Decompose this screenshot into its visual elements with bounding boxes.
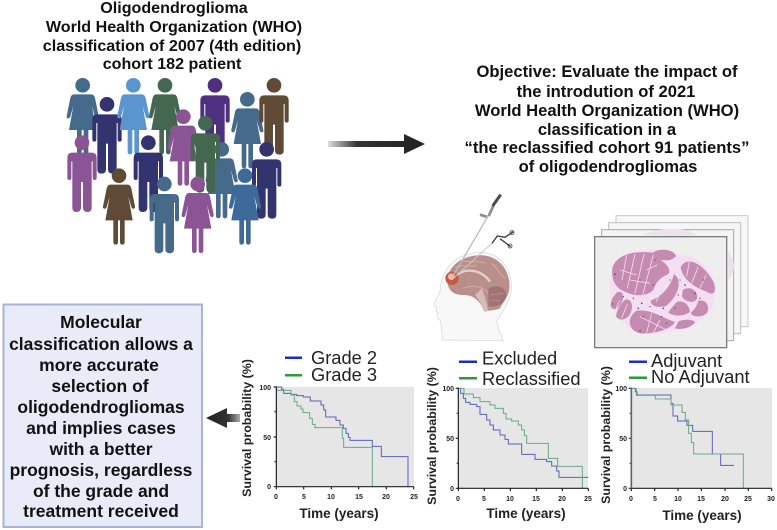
objective text	[465, 62, 749, 176]
forceps	[453, 243, 493, 278]
objective text: World Health Organization (WHO)	[475, 101, 739, 120]
objective text: the introdution of 2021	[517, 82, 695, 101]
legend: No Adjuvant	[651, 366, 750, 387]
arrow: to conclusion	[206, 408, 240, 428]
axis labels	[599, 366, 775, 523]
survival curves	[456, 388, 588, 491]
title	[43, 0, 302, 73]
conclusion box	[4, 304, 202, 527]
axis labels	[425, 367, 592, 521]
legend	[285, 347, 377, 385]
axis labels: 0	[456, 496, 460, 503]
conclusion box: oligodendrogliomas	[17, 397, 185, 417]
axis labels: 0	[274, 494, 278, 501]
arrow: to objective	[328, 134, 425, 154]
axis labels: Survival probability (%)	[425, 367, 439, 505]
title: cohort 182 patient	[103, 55, 242, 73]
axis labels: 100	[442, 386, 454, 393]
axis labels: 25	[410, 494, 418, 501]
axis labels: 20	[558, 496, 566, 503]
axis labels: Time (years)	[299, 506, 379, 521]
illustration: head with brain and surgical instruments	[434, 195, 514, 341]
legend: Adjuvant	[651, 350, 722, 371]
axis labels: Survival probability (%)	[240, 359, 254, 497]
axis labels: 100	[259, 385, 271, 392]
conclusion box: Molecular	[60, 312, 142, 332]
axis labels: 5	[482, 496, 486, 503]
survival curves	[629, 388, 772, 491]
title: World Health Organization (WHO)	[46, 18, 302, 36]
icon: crowd of patients	[67, 78, 289, 253]
legend	[629, 350, 750, 387]
conclusion box: with a better	[48, 439, 153, 459]
axis labels: 100	[615, 386, 627, 393]
axis labels	[240, 359, 418, 521]
legend: Excluded	[482, 348, 557, 368]
axis labels: 0	[629, 496, 633, 503]
conclusion box: of the grade and	[33, 481, 169, 501]
conclusion box: treatment received	[23, 501, 179, 521]
axis labels: 25	[584, 496, 592, 503]
axis labels: Time (years)	[486, 506, 566, 521]
chart: Adjuvant vs No Adjuvant	[599, 350, 775, 523]
brain	[447, 255, 509, 312]
axis labels: 15	[697, 496, 705, 503]
legend: Reclassified	[482, 368, 581, 389]
tissue section	[610, 249, 715, 334]
objective text: “the reclassified cohort 91 patients”	[465, 138, 749, 157]
conclusion box: and implies cases	[26, 418, 176, 438]
objective text: of oligodendrogliomas	[519, 157, 697, 176]
axis labels: 50	[619, 436, 627, 443]
chart: Excluded vs Reclassified	[425, 348, 592, 521]
endoscope	[453, 215, 489, 277]
axis labels: Survival probability (%)	[599, 366, 613, 504]
axis labels: 15	[355, 494, 363, 501]
conclusion box: more accurate	[39, 355, 159, 375]
objective text: classification in a	[538, 120, 677, 139]
axis labels: 5	[302, 494, 306, 501]
axis labels: 5	[653, 496, 657, 503]
legend: Grade 3	[311, 364, 377, 385]
axis labels: 20	[721, 496, 729, 503]
title: classification of 2007 (4th edition)	[43, 37, 301, 55]
conclusion box: prognosis, regardless	[10, 460, 193, 480]
front slide	[595, 237, 727, 348]
axis labels: 50	[446, 436, 454, 443]
legend	[459, 348, 581, 389]
head outline	[434, 252, 511, 341]
objective text: Objective: Evaluate the impact of	[477, 62, 738, 81]
axis labels: 10	[506, 496, 514, 503]
conclusion box: selection of	[51, 376, 149, 396]
axis labels: 20	[382, 494, 390, 501]
illustration: stacked histology slides	[595, 216, 748, 348]
axis labels: 10	[674, 496, 682, 503]
axis labels: Time (years)	[662, 508, 742, 523]
axis labels: 50	[263, 435, 271, 442]
conclusion box: classification allows a	[9, 334, 193, 354]
axis labels: 0	[450, 486, 454, 493]
axis labels: 0	[267, 484, 271, 491]
survival curves	[274, 386, 414, 489]
chart: Grade 2 vs Grade 3	[240, 347, 418, 521]
axis labels: 15	[532, 496, 540, 503]
axis labels: 10	[327, 494, 335, 501]
axis labels: 25	[744, 496, 752, 503]
legend: Grade 2	[311, 347, 377, 368]
axis labels: 0	[623, 486, 627, 493]
axis labels: 30	[767, 496, 775, 503]
